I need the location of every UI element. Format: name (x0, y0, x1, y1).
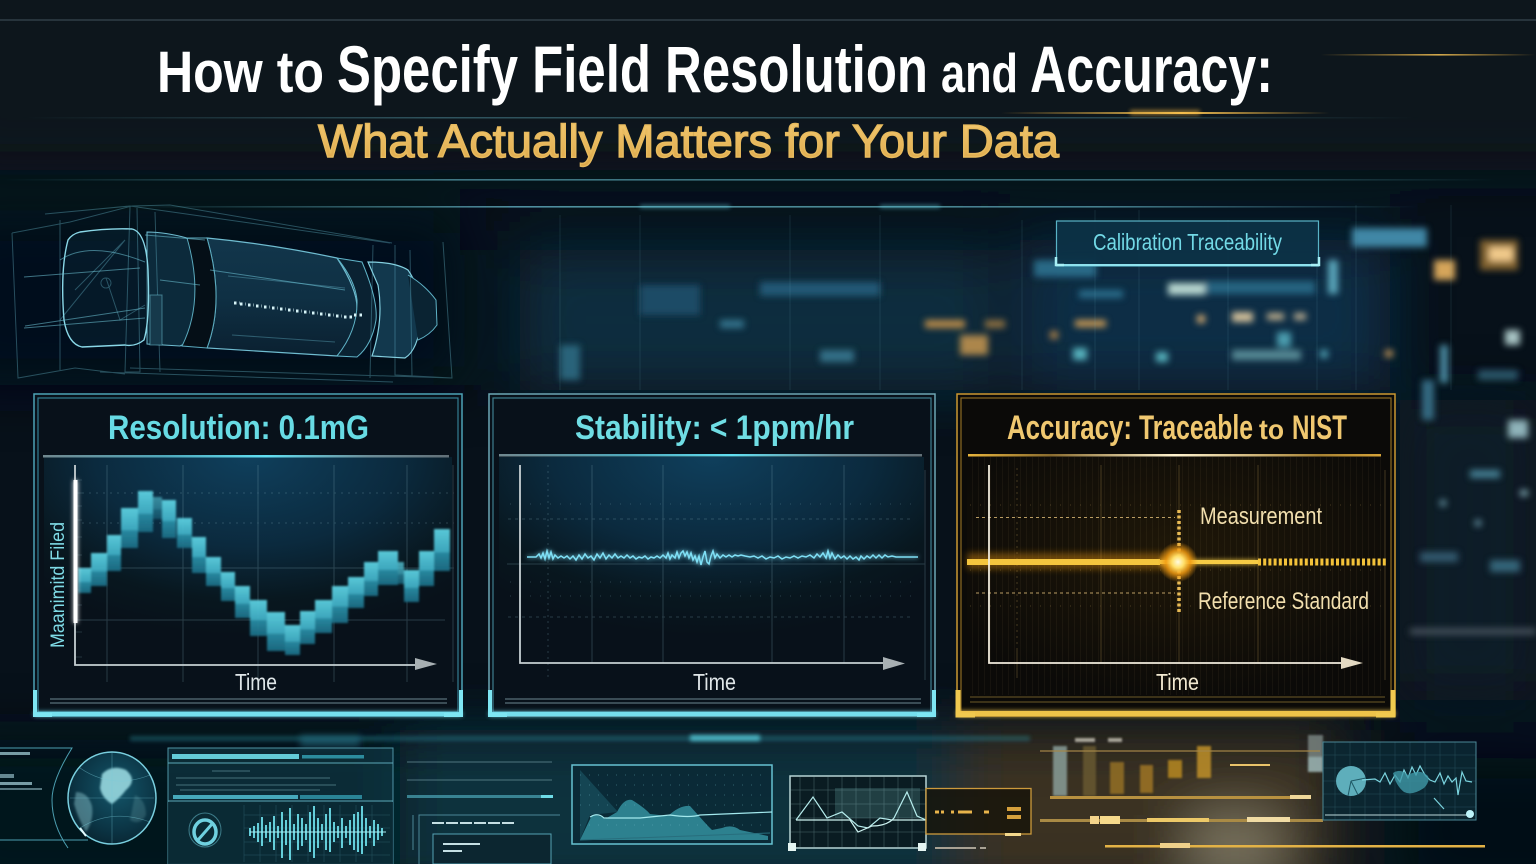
title: Specify Field Resolution (337, 32, 928, 106)
decorative header lines (0, 19, 1536, 208)
callout: Calibration Traceability (1056, 221, 1319, 266)
resolution chart grid (75, 465, 454, 682)
bottom glow line (130, 735, 1030, 747)
bottom dashboard panel with waveform (168, 748, 393, 864)
gold bar columns and streaks (1040, 735, 1485, 848)
stability header rule (499, 454, 922, 456)
title (157, 32, 1273, 106)
panel: accuracy (956, 393, 1396, 717)
title: and (941, 42, 1018, 104)
y axis label: Maanimitd Filed (48, 522, 69, 648)
accuracy heading (1007, 409, 1347, 447)
title: Accuracy: (1030, 32, 1273, 106)
panel: resolution (33, 393, 463, 717)
icon: dial (189, 813, 221, 847)
flare at trace crossing (1158, 542, 1198, 582)
stability heading: Stability: < 1ppm/hr (575, 409, 854, 447)
icon: globe (68, 752, 156, 844)
measurement label: Measurement (1200, 503, 1322, 530)
accuracy heading: Traceable (1139, 409, 1253, 447)
subtitle: What Actually Matters for Your Data (318, 115, 1059, 167)
accuracy header rule (968, 454, 1381, 456)
callout: Calibration Traceability: Calibration Traceability (1093, 229, 1282, 255)
stability noise trace (527, 551, 918, 565)
gold measurement trace (967, 553, 1387, 569)
accuracy chart grid (970, 465, 1385, 680)
wireframe sensor cylinder (12, 205, 452, 382)
small line chart (788, 776, 926, 851)
x axis label: Time (693, 669, 736, 695)
left data readout (0, 748, 88, 848)
stability axes (520, 465, 905, 670)
stepped magnitude bars (78, 491, 450, 655)
stability chart grid (507, 465, 925, 680)
bottom waveform (250, 806, 382, 860)
resolution header rule (43, 455, 449, 458)
accuracy axes (989, 465, 1363, 669)
small gold readout box (926, 788, 1031, 848)
accuracy heading: NIST (1292, 409, 1347, 447)
x axis label: Time (1156, 669, 1199, 695)
accuracy heading: Accuracy: (1007, 409, 1132, 447)
title: How to (157, 40, 324, 105)
small area chart (572, 765, 772, 844)
x axis label: Time (235, 669, 277, 695)
bottom right waveform panel (1323, 742, 1476, 820)
small side lines panel (407, 762, 560, 864)
measurement and reference dashed guides (976, 510, 1179, 612)
accuracy heading: to (1259, 414, 1284, 445)
reference standard label: Reference Standard (1198, 588, 1369, 615)
resolution heading: Resolution: 0.1mG (108, 409, 369, 447)
chart axes (74, 465, 437, 670)
panel: stability (488, 393, 936, 717)
